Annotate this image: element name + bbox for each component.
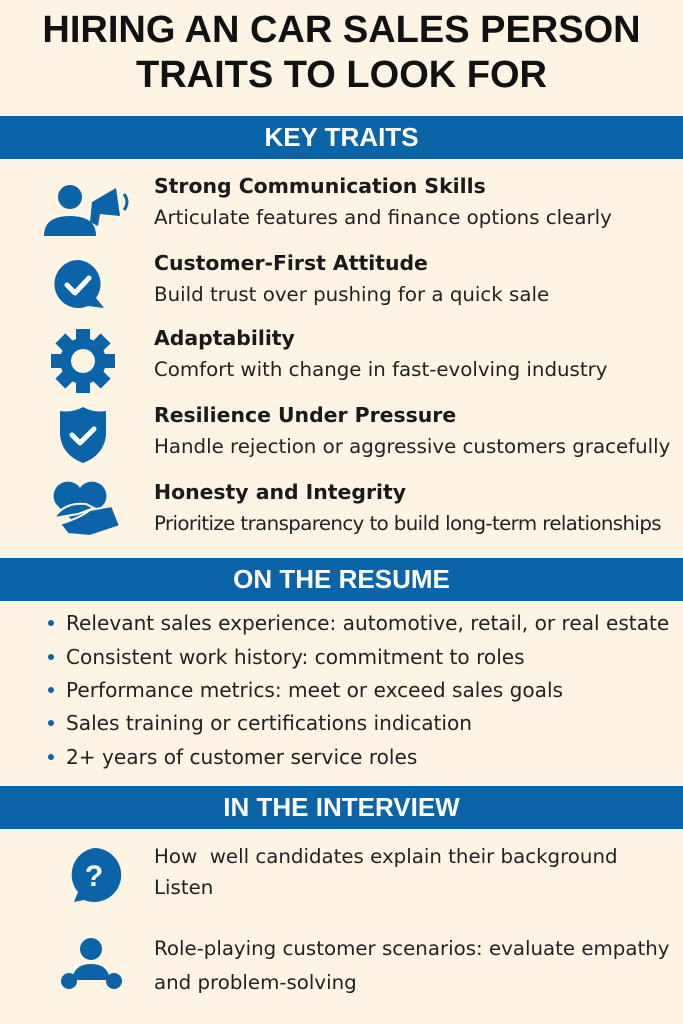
text: Prioritize transparency to build long-term relationships bbox=[154, 512, 661, 535]
interview item 2 bbox=[154, 937, 669, 994]
interview item 1: How well candidates explain their background bbox=[154, 845, 618, 868]
icon: shield check bbox=[60, 407, 106, 463]
text: Handle rejection or aggressive customers gracefully bbox=[154, 435, 670, 458]
resume bullets: 2+ years of customer service roles bbox=[66, 745, 417, 769]
interview item 2: and problem-solving bbox=[154, 971, 357, 994]
icon: person megaphone bbox=[44, 185, 128, 236]
resume bullets: Relevant sales experience: automotive, retail, or real estate bbox=[66, 611, 669, 635]
text: Comfort with change in fast-evolving industry bbox=[154, 358, 607, 381]
resume bullets: Performance metrics: meet or exceed sales goals bbox=[66, 678, 563, 702]
text: Build trust over pushing for a quick sale bbox=[154, 283, 549, 306]
interview item 1: Listen bbox=[154, 876, 213, 899]
banner: on the resume bbox=[0, 558, 683, 601]
banner: key traits: KEY TRAITS bbox=[264, 122, 419, 152]
trait 2: Customer-First Attitude bbox=[154, 251, 428, 275]
icon: person group bbox=[61, 938, 122, 989]
text: Articulate features and finance options clearly bbox=[154, 206, 612, 229]
trait 4: Resilience Under Pressure bbox=[154, 403, 456, 427]
banner: in the interview: IN THE INTERVIEW bbox=[223, 792, 460, 822]
title: TRAITS TO LOOK FOR bbox=[136, 54, 547, 96]
interview item 1 bbox=[154, 845, 618, 899]
trait 3: Adaptability bbox=[154, 326, 295, 350]
banner: in the interview bbox=[0, 786, 683, 829]
resume bullets: Sales training or certifications indication bbox=[66, 711, 472, 735]
resume bullets bbox=[48, 611, 669, 769]
banner: key traits bbox=[0, 116, 683, 159]
trait 1: Strong Communication Skills bbox=[154, 174, 486, 198]
title bbox=[42, 9, 641, 96]
banner: on the resume: ON THE RESUME bbox=[233, 564, 450, 594]
icon: question bubble bbox=[72, 848, 122, 902]
icon: chat check bbox=[54, 260, 104, 308]
trait 5: Honesty and Integrity bbox=[154, 480, 406, 504]
title: HIRING AN CAR SALES PERSON bbox=[42, 9, 641, 51]
icon: heart hand bbox=[54, 482, 119, 535]
interview item 2: Role-playing customer scenarios: evaluate empathy bbox=[154, 937, 669, 960]
icon: question bubble: ? bbox=[85, 860, 103, 893]
icon: gear bbox=[51, 329, 115, 393]
resume bullets: Consistent work history: commitment to roles bbox=[66, 645, 525, 669]
